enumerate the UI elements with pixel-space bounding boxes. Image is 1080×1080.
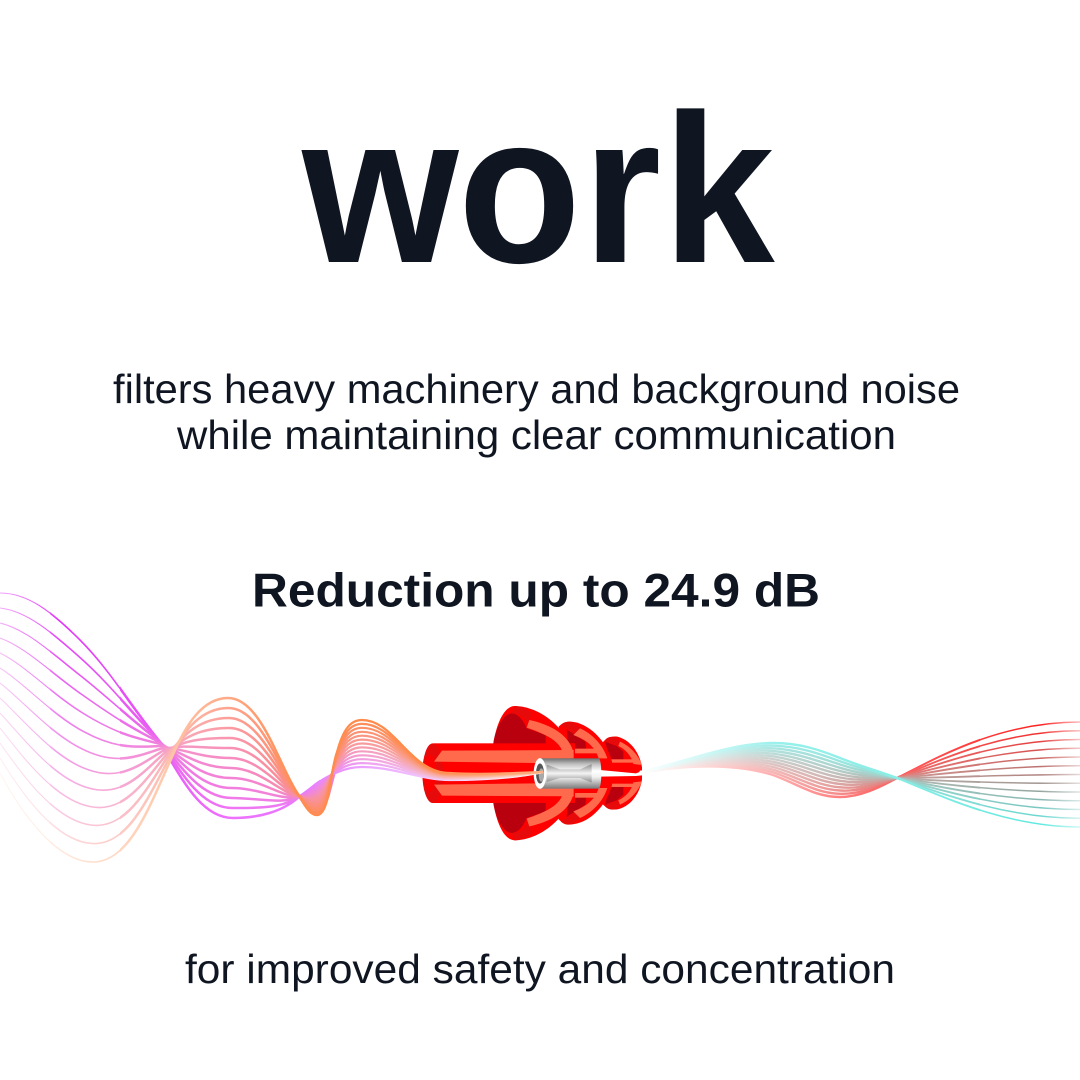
large flange	[493, 706, 574, 840]
text block: closing benefit: for improved safety and concentration	[185, 946, 895, 992]
text block: noise filtering description	[113, 366, 960, 458]
icon: red earplug with silver filter	[422, 706, 642, 840]
silver filter tube	[534, 758, 601, 789]
third flange	[602, 736, 642, 810]
text block: noise filtering description: filters heavy machinery and background noise	[113, 366, 960, 412]
sound wave: filtered output, cyan and red	[640, 722, 1080, 827]
stem body	[422, 743, 575, 803]
title: work: work	[301, 70, 776, 307]
sound wave: incoming noise, magenta to orange	[0, 593, 543, 862]
slit through the filter	[600, 770, 642, 777]
heading: noise reduction figure: Reduction up to 24.9 dB	[252, 564, 820, 616]
text block: noise filtering description: while maintaining clear communication	[176, 412, 896, 458]
second flange	[559, 722, 612, 825]
